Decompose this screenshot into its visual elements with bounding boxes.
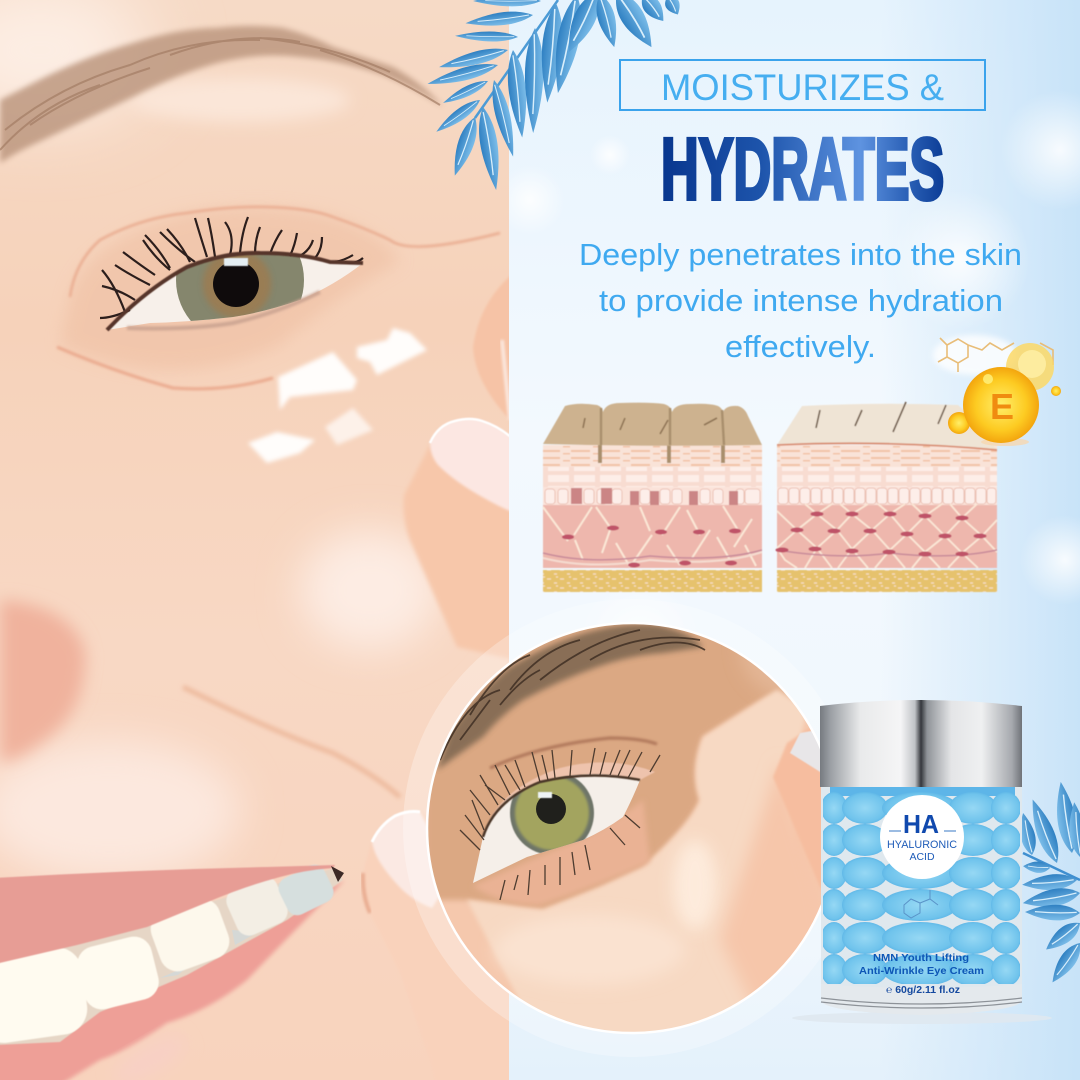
lower teeth hint: [160, 930, 258, 978]
upper lid: [489, 762, 654, 820]
lower finger with nail: [363, 810, 515, 1080]
heading box: moisturizes: [620, 60, 985, 110]
body text: effectively.: [725, 329, 876, 364]
under-eye bag: [473, 800, 650, 905]
vitamin E capsules and molecule: E: [990, 386, 1014, 427]
teeth: [0, 861, 337, 1046]
skin diagram: damaged: [543, 403, 762, 592]
body text: [579, 237, 1022, 364]
eye: [473, 774, 640, 883]
heading box: moisturizes: MOISTURIZES &: [661, 67, 944, 108]
upper lip: [0, 865, 335, 964]
jar body: [821, 785, 1022, 1015]
product jar: ACID: [909, 851, 935, 863]
eye white: [107, 253, 363, 330]
product jar: Anti-Wrinkle Eye Cream: [859, 966, 984, 977]
right background panel: [495, 0, 1080, 1080]
eyebrow: [0, 26, 443, 163]
product jar: HYALURONIC: [887, 839, 957, 851]
upper finger, side: [473, 277, 509, 416]
molecule mark: [904, 890, 938, 918]
leaf branch: top: [426, 0, 684, 191]
under-eye gel sheen: [467, 690, 807, 1040]
smile crease: [183, 687, 400, 797]
body text: to provide intense hydration: [599, 283, 1003, 318]
nose shadow: [0, 600, 85, 762]
vitamin E capsules and molecule: [933, 335, 1061, 446]
lower lash line: [127, 292, 320, 328]
product name: NMN Youth Lifting: [873, 953, 969, 964]
lower lip: [0, 880, 345, 1080]
finger: [773, 728, 821, 886]
under-eye crease: [57, 347, 273, 389]
lid crease: [490, 738, 657, 768]
mouth interior: [0, 868, 343, 1045]
eyelashes: [460, 748, 660, 900]
product jar: [792, 700, 1052, 1024]
product jar: HA: [903, 809, 939, 839]
body text: Deeply penetrates into the skin: [579, 237, 1022, 272]
skin diagram: hydrated: [776, 402, 997, 592]
inset circle: hydrated under-eye photo: [404, 623, 821, 1034]
product jar: ℮ 60g/2.11 fl.oz: [886, 985, 960, 996]
eyebrow: [437, 624, 705, 770]
silver lid: [820, 700, 1022, 787]
photo: woman's face applying eye cream: [0, 0, 515, 1080]
cream dabs: [248, 328, 427, 463]
heading: hydrates: HYDRATES: [661, 121, 944, 218]
lid crease: [70, 207, 500, 297]
finger with nail: [404, 440, 515, 660]
leaf branch: lower right: [1016, 780, 1080, 987]
upper lashes: [100, 217, 363, 318]
jar base: [821, 984, 1022, 1015]
brow-bone and lid tone: [428, 624, 774, 910]
eye socket shading: [60, 207, 400, 370]
label circle: [880, 795, 964, 879]
